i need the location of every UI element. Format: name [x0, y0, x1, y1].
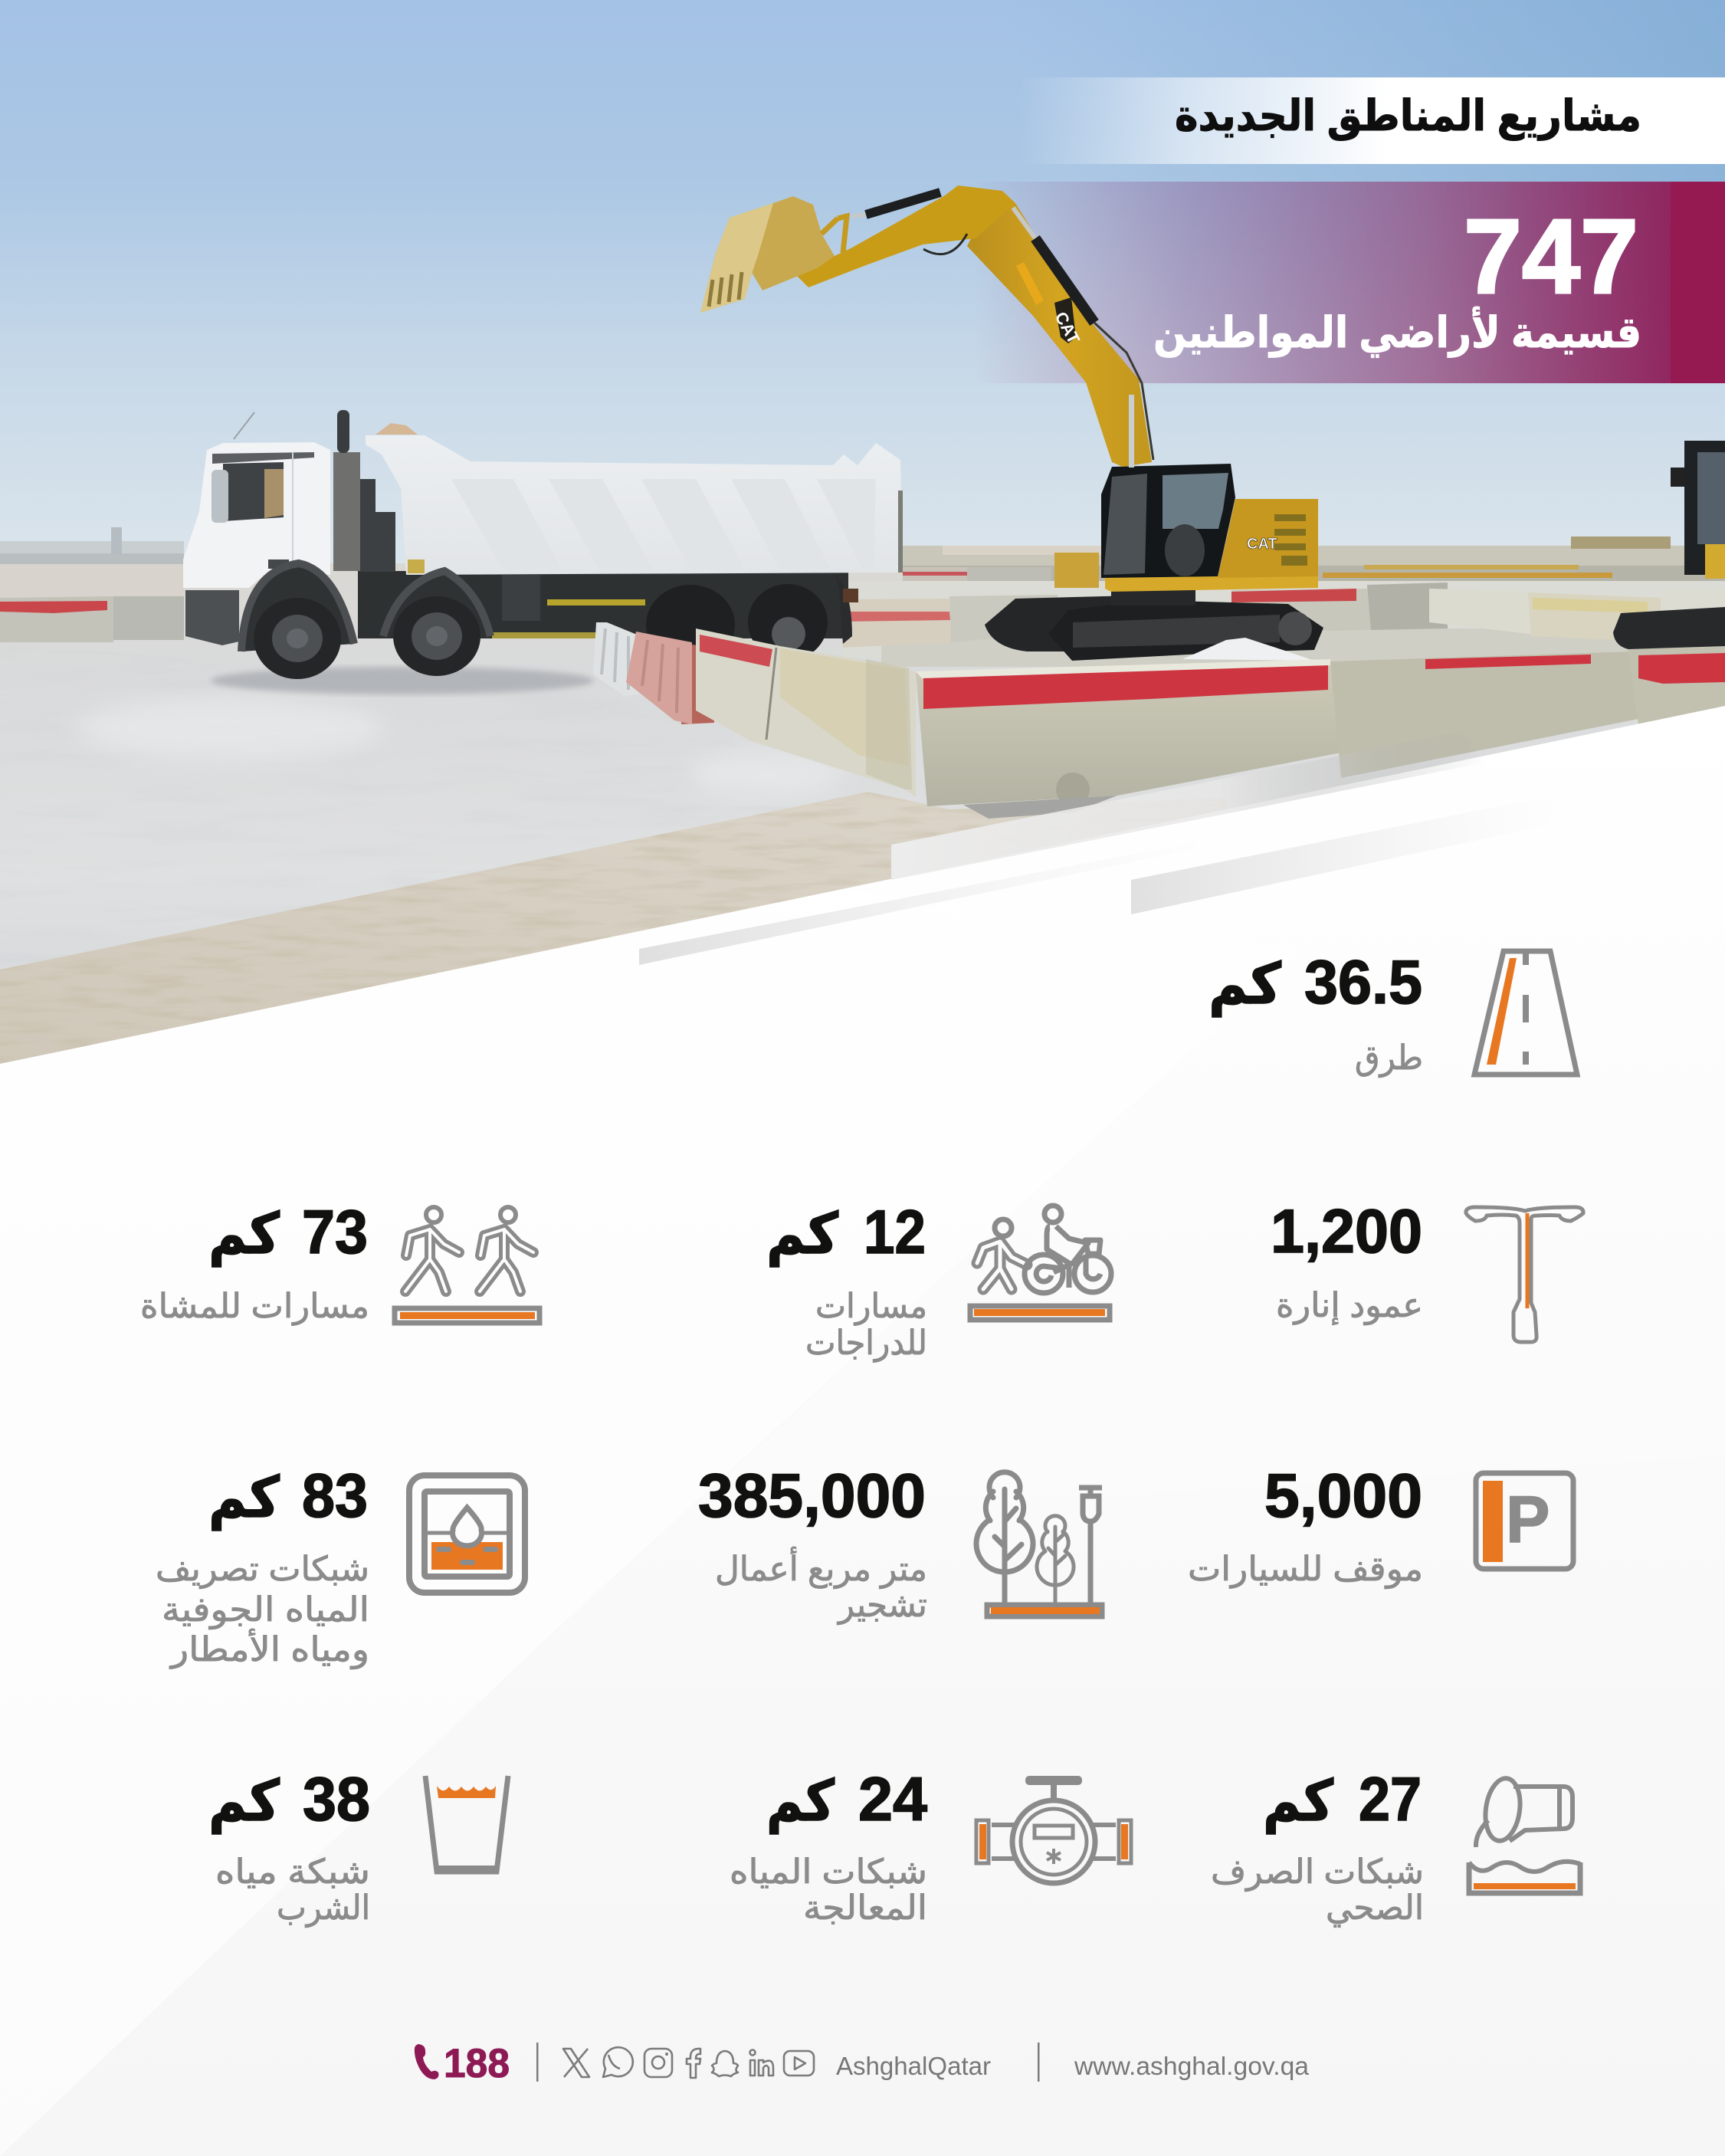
- right foreground barriers: [1330, 651, 1638, 778]
- decorative diagonal bands: [639, 731, 1571, 965]
- stat: drainage networks: 83: [302, 1462, 368, 1531]
- icon: Instagram: [644, 2049, 672, 2077]
- truck wheels: [241, 563, 490, 679]
- second excavator at right edge: [1613, 441, 1725, 650]
- stat: treated water networks: المعالجة: [803, 1889, 927, 1927]
- stat: cycle paths: مسارات: [815, 1288, 927, 1326]
- photo: dump truck and excavator on site: [0, 185, 1725, 1088]
- stat: sewage networks: 27: [1359, 1765, 1422, 1834]
- icon: water glass: [425, 1776, 508, 1873]
- distant barriers and horizon: [0, 527, 1725, 667]
- concrete barriers: [593, 622, 1725, 819]
- stat: drinking water network: 38: [303, 1765, 370, 1834]
- stat: sewage networks: الصحي: [1326, 1889, 1424, 1928]
- stat: landscaping: [698, 1462, 1102, 1625]
- stat: roads: طرق: [1355, 1039, 1423, 1078]
- hotline number: 188: [444, 2041, 510, 2086]
- red-brown plastic barrier: [681, 644, 714, 724]
- icon: street light: [1466, 1207, 1583, 1342]
- white plastic barrier: [593, 622, 641, 696]
- icon: parking sign: P: [1506, 1483, 1550, 1557]
- social handle: AshghalQatar: [836, 2052, 991, 2080]
- stat: treated water networks: شبكات المياه: [730, 1853, 927, 1891]
- stat: cycle paths: كم: [766, 1202, 839, 1267]
- icon: road: [1474, 951, 1577, 1075]
- excavator upper body: [1054, 464, 1318, 592]
- stat: drainage networks: [156, 1462, 525, 1669]
- headline band gradient: [973, 182, 1725, 383]
- stat: drainage networks: كم: [208, 1465, 280, 1531]
- icon: LinkedIn: [749, 2049, 773, 2076]
- icon: water meter valve: [976, 1776, 1131, 1883]
- icon: Facebook: [687, 2049, 700, 2078]
- stat: drainage networks: ومياه الأمطار: [169, 1628, 369, 1669]
- stat: cycle paths: [766, 1198, 1111, 1363]
- stat: landscaping: متر مربع أعمال: [715, 1547, 927, 1589]
- excavator tracks: [985, 589, 1323, 661]
- excavator: [700, 185, 1323, 661]
- icon: pedestrian and cyclist: [970, 1206, 1111, 1320]
- stat: roads: كم: [1208, 952, 1282, 1017]
- headline caption: قسيمة لأراضي المواطنين: [1153, 306, 1641, 358]
- stat: treated water networks: كم: [766, 1769, 835, 1834]
- ground: [0, 541, 1725, 1088]
- social media icons: [563, 2047, 814, 2078]
- stat: roads: [1208, 948, 1577, 1078]
- stat: drinking water network: الشرب: [277, 1889, 370, 1928]
- stat: light poles: عمود إنارة: [1276, 1287, 1423, 1325]
- excavator boom and arm: CAT: [1051, 309, 1084, 347]
- stat: drinking water network: شبكة مياه: [215, 1853, 370, 1891]
- stat: light poles: [1271, 1197, 1583, 1342]
- truck bed: [366, 423, 903, 575]
- excavator upper body: CAT: [1247, 536, 1277, 553]
- headline block: 747 plots: [973, 182, 1725, 383]
- footer contact bar: [415, 2041, 1310, 2086]
- icon: sewage pipe: [1469, 1776, 1580, 1893]
- stat: pedestrian paths: 73: [302, 1198, 368, 1267]
- stat: drainage networks: المياه الجوفية: [162, 1591, 369, 1629]
- stat: pedestrian paths: مسارات للمشاة: [140, 1288, 369, 1326]
- icon: two pedestrians: [395, 1207, 539, 1323]
- excavator boom and arm: [700, 185, 1153, 468]
- truck chassis: [358, 571, 858, 665]
- stat: parking: [1188, 1462, 1573, 1589]
- website: www.ashghal.gov.qa: [1074, 2052, 1310, 2080]
- icon: drainage with water drop: [409, 1475, 525, 1593]
- headline number: 747: [1464, 198, 1638, 316]
- photo: sky background: [0, 0, 1725, 582]
- stat: light poles: 1,200: [1271, 1197, 1422, 1266]
- title: مشاريع المناطق الجديدة: [1175, 91, 1641, 141]
- icon: parking sign: [1476, 1473, 1573, 1569]
- background barriers: [0, 582, 1725, 648]
- icon: Snapchat: [712, 2051, 738, 2076]
- icon: WhatsApp: [603, 2047, 633, 2077]
- stat: drinking water network: كم: [208, 1769, 280, 1834]
- lower panel background: [0, 706, 1725, 2156]
- stat: pedestrian paths: كم: [208, 1202, 280, 1267]
- stat: landscaping: 385,000: [698, 1462, 926, 1531]
- title band: [1019, 77, 1725, 164]
- foreground barrier: [916, 661, 1341, 806]
- stat: sewage networks: [1211, 1765, 1580, 1928]
- angled concrete barrier run: [696, 628, 916, 797]
- dump truck: [183, 410, 903, 694]
- stat: parking: 5,000: [1264, 1462, 1422, 1531]
- icon: YouTube: [784, 2051, 814, 2076]
- stat: cycle paths: 12: [864, 1198, 926, 1267]
- stat: cycle paths: للدراجات: [805, 1324, 927, 1363]
- stat: sewage networks: كم: [1263, 1769, 1334, 1834]
- icon: trees and lamp: [976, 1472, 1102, 1616]
- stat: pedestrian paths: [140, 1198, 539, 1326]
- icon: phone: [415, 2044, 438, 2079]
- stat: treated water networks: [730, 1765, 1131, 1927]
- stat: sewage networks: شبكات الصرف: [1211, 1853, 1424, 1892]
- stat: roads: 36.5: [1304, 948, 1422, 1017]
- icon: X: [563, 2049, 589, 2077]
- stat: treated water networks: 24: [858, 1765, 927, 1834]
- stat: parking: موقف للسيارات: [1188, 1551, 1423, 1589]
- stat: drinking water network: [208, 1765, 508, 1928]
- stat: landscaping: تشجير: [837, 1587, 927, 1625]
- pink plastic barrier: [626, 632, 692, 724]
- truck cab: [183, 410, 395, 645]
- stat: drainage networks: شبكات تصريف: [156, 1551, 369, 1589]
